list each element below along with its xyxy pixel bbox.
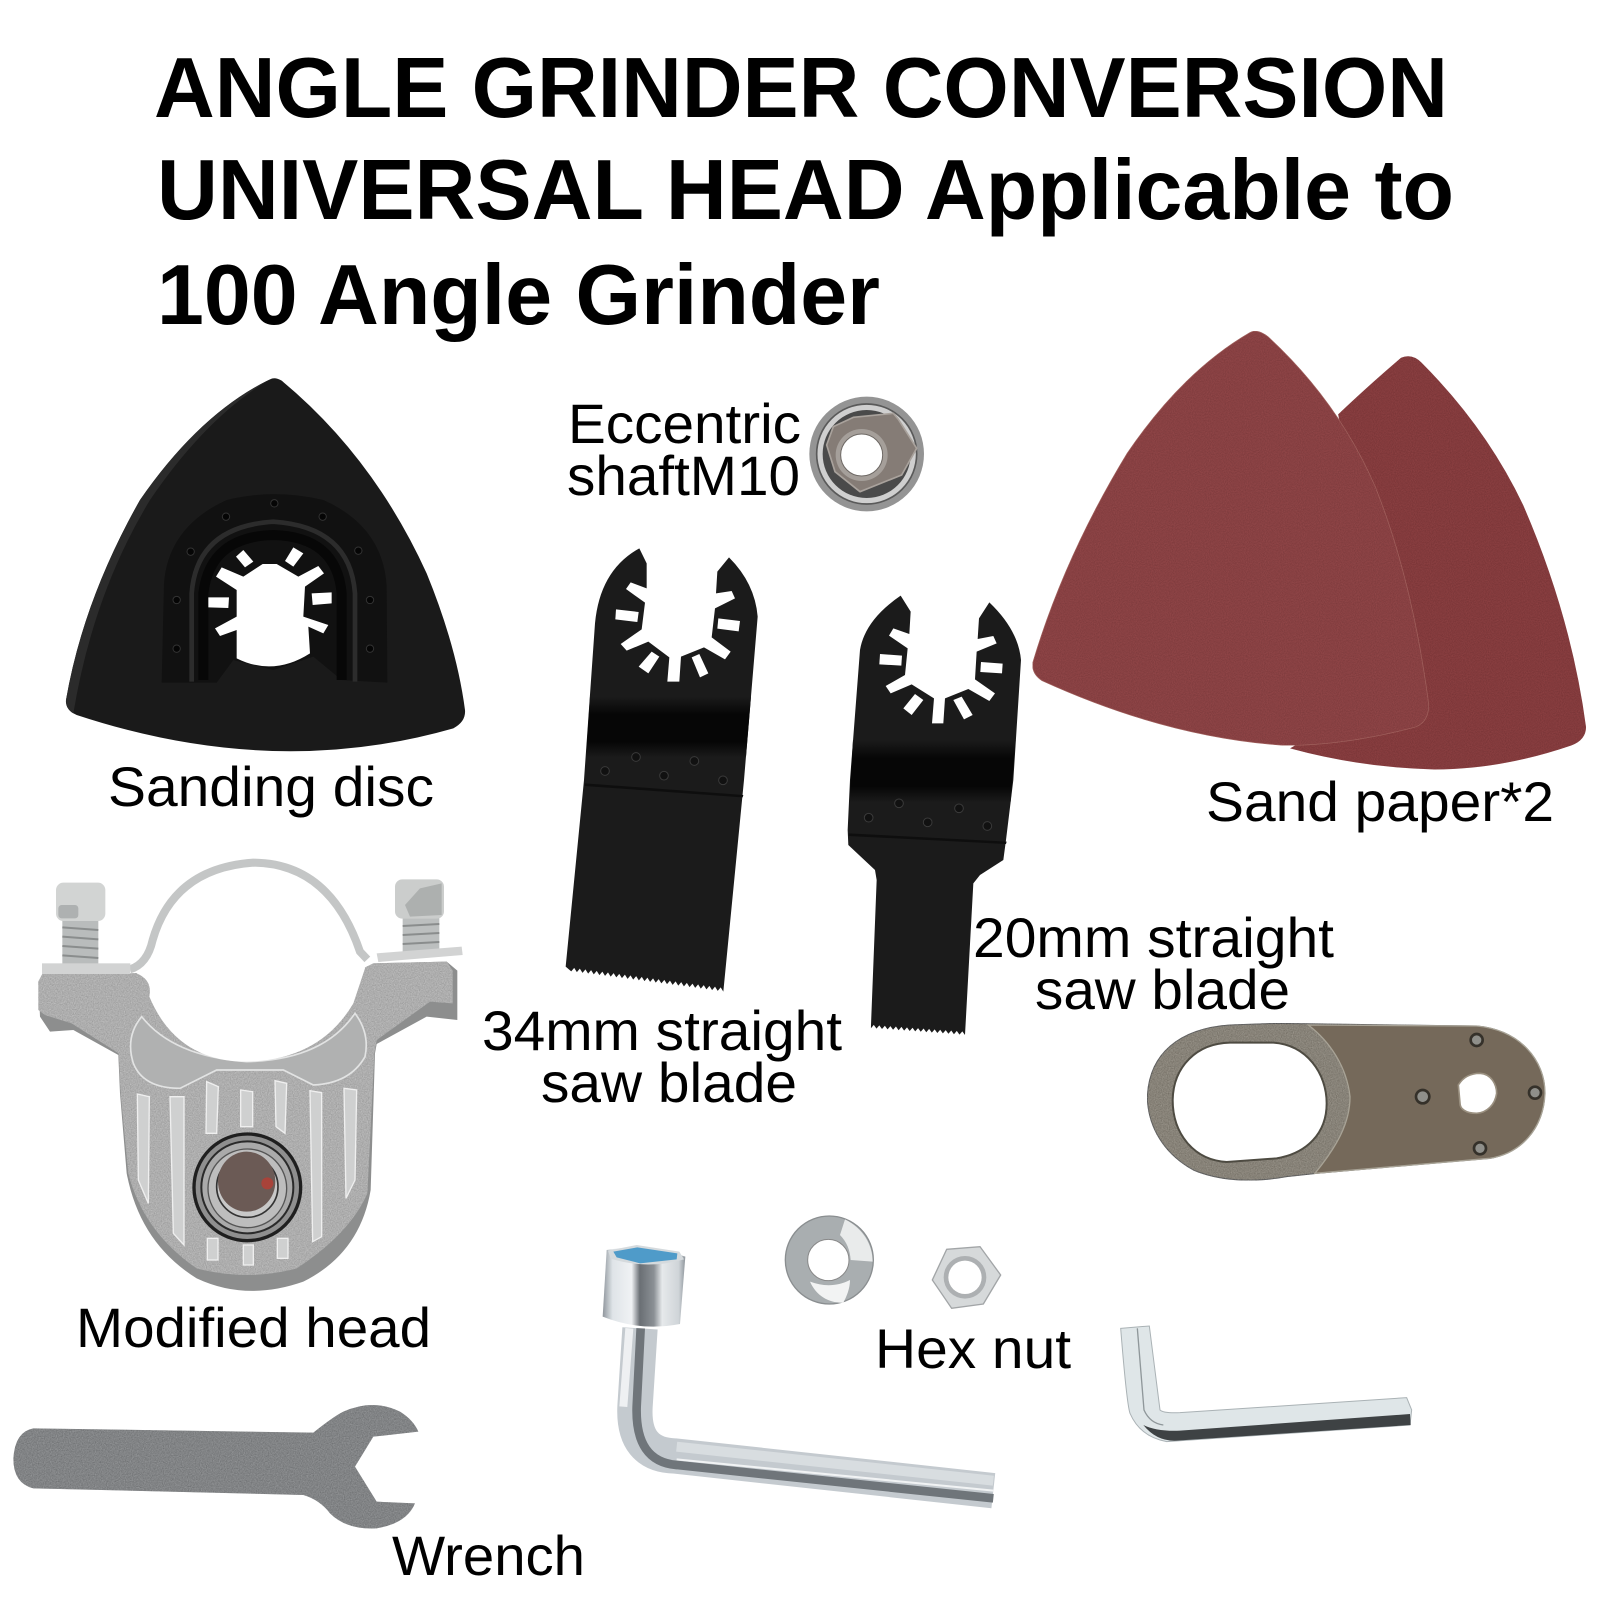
label: sanding disc: Sanding disc	[108, 755, 434, 818]
photo: modified head	[38, 860, 463, 1291]
photo: 20mm saw blade	[848, 596, 1021, 1035]
photo: eccentric shaft bearing	[809, 397, 924, 511]
label: 20mm blade: 20mm straight	[973, 906, 1334, 969]
label: 20mm blade: saw blade	[1035, 958, 1290, 1021]
photo: open-end wrench	[13, 1405, 418, 1528]
label: 20mm blade	[973, 906, 1334, 1021]
title: UNIVERSAL HEAD Applicable to	[157, 143, 1454, 238]
ribs	[137, 1081, 357, 1265]
label: eccentric shaft	[567, 392, 801, 507]
label: modified head: Modified head	[76, 1296, 431, 1359]
left bolt	[56, 883, 105, 965]
title: 100 Angle Grinder	[157, 248, 880, 343]
label: 34mm blade	[482, 999, 842, 1114]
title: ANGLE GRINDER CONVERSION	[154, 41, 1448, 136]
label: hex nut: Hex nut	[875, 1317, 1071, 1380]
clamp opening	[137, 860, 365, 1062]
photo: hex nut	[932, 1247, 1001, 1308]
label: eccentric shaft: shaftM10	[567, 444, 800, 507]
body shell	[38, 962, 457, 1291]
photo: socket L-wrench	[603, 1245, 993, 1498]
clamp plates	[42, 947, 463, 974]
photo: connecting plate	[1147, 1023, 1545, 1180]
title	[154, 41, 1454, 343]
photo: 34mm saw blade	[566, 548, 758, 992]
label: eccentric shaft: Eccentric	[568, 392, 801, 455]
label: 34mm blade: saw blade	[541, 1051, 797, 1114]
label: wrench: Wrench	[392, 1524, 585, 1587]
label: sand paper: Sand paper*2	[1206, 770, 1554, 833]
right bolt	[395, 879, 444, 952]
bearing	[194, 1134, 301, 1241]
photo: sand paper sheets	[1033, 331, 1586, 769]
clamp band	[130, 863, 367, 969]
label: 34mm blade: 34mm straight	[482, 999, 842, 1062]
photo: sanding disc	[66, 378, 465, 751]
photo: hex key	[1121, 1326, 1412, 1442]
photo: washer	[785, 1216, 873, 1304]
